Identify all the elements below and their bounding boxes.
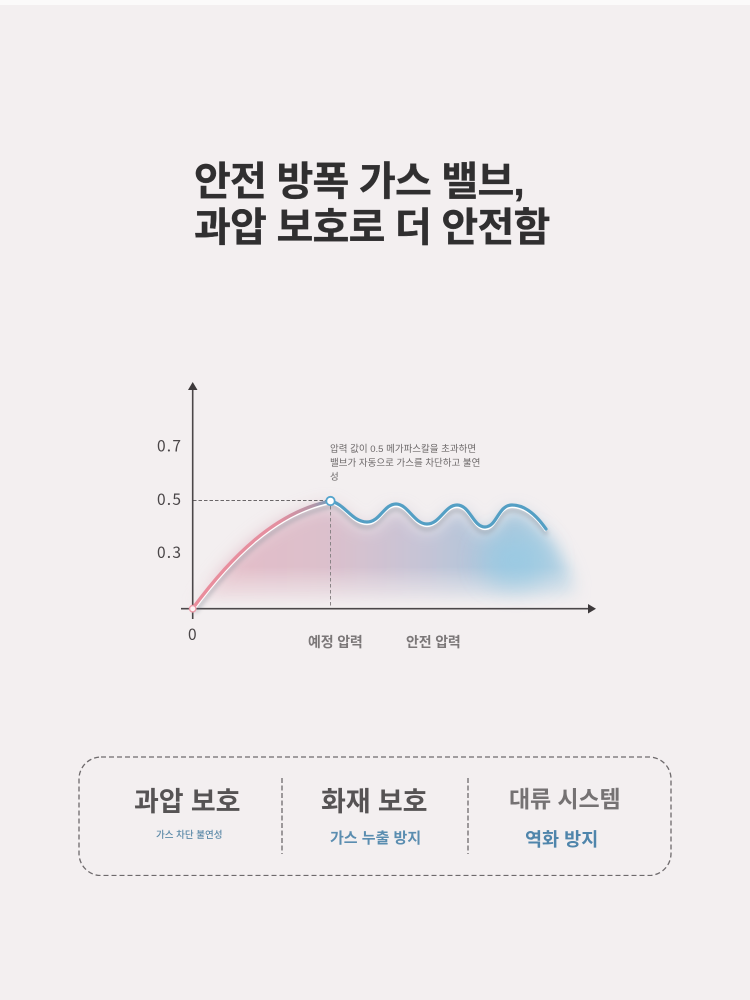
title: 과압 보호로 더 안전함 xyxy=(194,206,550,250)
dashed guide lines xyxy=(193,500,330,608)
peak marker xyxy=(326,497,335,505)
chart annotation: 압력 값이 0.5 메가파스칼을 초과하면 xyxy=(330,444,476,455)
pink rising curve xyxy=(193,501,330,608)
convection heading: 대류 시스템 xyxy=(509,786,621,812)
blue glow xyxy=(483,535,549,585)
x axis label: rated pressure: 예정 압력 xyxy=(308,634,363,650)
fire subtext: 가스 누출 방지 xyxy=(330,830,421,847)
overpressure heading: 과압 보호 xyxy=(134,787,240,817)
y axis labels: 0 xyxy=(188,623,198,645)
top edge strip xyxy=(0,0,750,5)
chart annotation xyxy=(330,444,480,483)
pressure chart xyxy=(158,382,596,640)
y axis labels xyxy=(157,434,198,645)
axes xyxy=(181,382,596,619)
origin marker xyxy=(190,606,196,612)
convection subtext: 역화 방지 xyxy=(525,829,598,850)
y axis labels: 0.5 xyxy=(157,488,182,510)
title xyxy=(194,160,550,250)
panel: protection features xyxy=(78,756,672,876)
fire heading: 화재 보호 xyxy=(321,787,427,817)
curve shadow xyxy=(195,506,547,612)
title: 안전 방폭 가스 밸브, xyxy=(194,160,524,204)
x axis label: safe pressure: 안전 압력 xyxy=(406,634,461,650)
chart annotation: 밸브가 자동으로 가스를 차단하고 불연 xyxy=(330,458,480,469)
curve white edge xyxy=(194,503,546,610)
blue wave curve xyxy=(330,501,546,529)
area under the curve xyxy=(193,505,574,612)
y axis labels: 0.7 xyxy=(157,434,182,456)
overpressure subtext: 가스 차단 불연성 xyxy=(156,830,222,841)
chart annotation: 성 xyxy=(330,472,339,483)
y axis labels: 0.3 xyxy=(157,541,182,563)
